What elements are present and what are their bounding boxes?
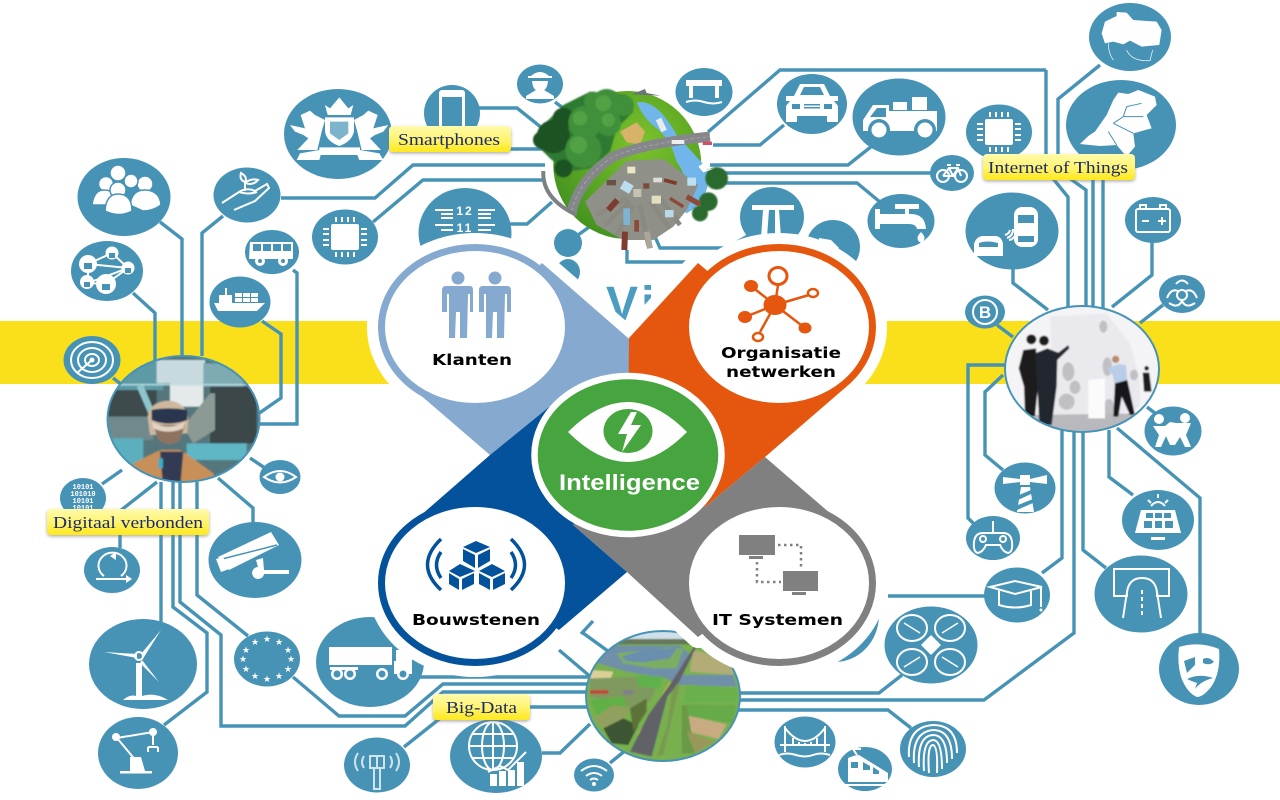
callout: Big-Data: Big-Data bbox=[446, 698, 518, 717]
icon: biohazard bbox=[1159, 275, 1205, 313]
icon: graduation cap bbox=[984, 568, 1050, 622]
icon: bridge top bbox=[676, 68, 732, 116]
icon: eye bbox=[260, 460, 300, 494]
panel: Intelligence bbox=[534, 376, 722, 534]
icon: EU stars: ★ bbox=[263, 675, 271, 685]
trees on right bbox=[692, 167, 728, 221]
road bbox=[572, 137, 710, 211]
callout: Big-Data bbox=[433, 694, 530, 720]
icon: wifi bbox=[574, 758, 614, 792]
icon: EU stars: ★ bbox=[239, 655, 247, 665]
icon: clipped circle near drone bbox=[791, 568, 879, 662]
icon: robot arm bbox=[98, 717, 178, 789]
callout: Internet of Things bbox=[983, 154, 1135, 180]
road side arc bbox=[543, 171, 577, 215]
icon: Dutch coat of arms bbox=[284, 89, 392, 179]
white panel behind logo bbox=[450, 321, 810, 384]
icon: car front bbox=[777, 74, 847, 134]
icon: water tap bbox=[868, 194, 934, 248]
icon: bitcoin: B bbox=[979, 303, 991, 322]
icon: EU stars: ★ bbox=[275, 638, 283, 648]
label: IT Systemen: IT Systemen bbox=[712, 611, 843, 629]
callout: Internet of Things: Internet of Things bbox=[988, 158, 1128, 177]
icon: location dot bbox=[554, 229, 582, 285]
white halo around central diagram bbox=[367, 233, 887, 677]
logo: Vi: Vi bbox=[606, 278, 658, 331]
label: Klanten: Klanten bbox=[432, 351, 512, 369]
icon: eye with lightning bolt bbox=[568, 402, 687, 462]
connector lines bbox=[102, 65, 1200, 763]
icon: EU stars: ★ bbox=[242, 665, 250, 675]
left icon group bbox=[60, 158, 614, 793]
icon: drone bbox=[884, 606, 978, 684]
icon: VR head bbox=[1089, 3, 1171, 71]
icon: person with helmet bbox=[517, 64, 563, 104]
icon: building blocks bbox=[428, 539, 524, 590]
icon: EU stars: ★ bbox=[287, 655, 295, 665]
callout: Smartphones: Smartphones bbox=[398, 130, 500, 149]
river bbox=[637, 102, 710, 213]
panel: Bouwstenen bbox=[382, 407, 628, 662]
photo: VR headset wearer bbox=[106, 355, 260, 483]
icon: solar panel bbox=[1122, 490, 1194, 550]
central diagram bbox=[382, 248, 872, 662]
icon: runway ruler: 12 bbox=[456, 204, 474, 218]
sand patch bbox=[620, 122, 645, 144]
forest bbox=[533, 89, 634, 177]
icon: lorry bbox=[316, 617, 424, 707]
panel: Klanten bbox=[382, 248, 690, 455]
icon: loop arrow bbox=[84, 547, 140, 593]
icon: fingerprint bbox=[900, 721, 966, 777]
icon: bitcoin bbox=[965, 296, 1005, 328]
icon: EU stars: ★ bbox=[284, 646, 292, 656]
icon: battery bbox=[1125, 197, 1181, 243]
icon: bus bbox=[245, 230, 299, 274]
icon: globe with chart bbox=[450, 719, 542, 793]
label: Bouwstenen: Bouwstenen bbox=[412, 611, 540, 629]
panel: Organisatie netwerken bbox=[628, 248, 872, 507]
icon: suspension bridge bbox=[774, 716, 836, 768]
icon: EU stars: ★ bbox=[242, 646, 250, 656]
icon: EU stars: ★ bbox=[284, 665, 292, 675]
icon: delivery van bbox=[852, 78, 946, 156]
icon: binary data: 10101 bbox=[72, 484, 94, 492]
callout: Digitaal verbonden: Digitaal verbonden bbox=[53, 513, 204, 532]
icon: binary data: 101010 bbox=[70, 491, 96, 499]
icon: cargo ship bbox=[210, 276, 270, 328]
icon: game controller bbox=[966, 516, 1020, 560]
label: Organisatie netwerken: netwerken bbox=[726, 363, 836, 381]
icon: EU stars bbox=[234, 632, 300, 686]
icon: bicycle bbox=[930, 155, 974, 191]
photo: business people with puzzle bbox=[1004, 305, 1160, 433]
icon: world fragment bbox=[806, 220, 860, 274]
icon: locks network bbox=[71, 241, 143, 301]
callout: Smartphones bbox=[389, 126, 511, 152]
icon: lighthouse bbox=[994, 462, 1056, 514]
city bbox=[585, 159, 700, 250]
background yellow band bbox=[0, 321, 1280, 384]
label: Organisatie netwerken bbox=[721, 344, 841, 381]
icon: security camera bbox=[208, 522, 302, 598]
icon: runway ruler bbox=[418, 188, 512, 278]
icon: EU stars: ★ bbox=[263, 635, 271, 645]
label: Organisatie netwerken: Organisatie bbox=[721, 344, 841, 362]
icon: microchip left bbox=[312, 210, 378, 264]
icon: parking sensor cars bbox=[966, 192, 1058, 270]
icon: smartphone bbox=[424, 85, 480, 141]
icon: runway ruler: 11 bbox=[457, 221, 473, 235]
label: Intelligence: Intelligence bbox=[559, 470, 700, 495]
icon: EU stars: ★ bbox=[251, 672, 259, 682]
icon: playing children bbox=[1144, 406, 1202, 456]
icon: Guy Fawkes mask bbox=[1159, 633, 1239, 705]
icon: binary data: 10101 bbox=[72, 505, 94, 513]
icon: microchip right bbox=[966, 104, 1032, 160]
top icon group bbox=[284, 3, 1239, 791]
icon: map of the Netherlands bbox=[1066, 80, 1176, 170]
callout: Digitaal verbonden bbox=[47, 509, 209, 535]
icon: connected monitors bbox=[739, 535, 818, 595]
panel: IT Systemen bbox=[573, 453, 872, 662]
icon: network bbox=[738, 268, 818, 341]
icon: tunnel bbox=[1094, 556, 1188, 632]
icon: wind turbine bbox=[89, 619, 197, 709]
icon: train bbox=[838, 747, 892, 791]
icon: two people bbox=[442, 272, 511, 338]
vehicles and boats bbox=[632, 89, 715, 172]
photo: aerial landscape with motorway bbox=[585, 630, 741, 762]
icon: EU stars: ★ bbox=[251, 638, 259, 648]
icon: EU stars: ★ bbox=[275, 672, 283, 682]
icon: binary data bbox=[60, 478, 106, 518]
icon: binary data: 10101 bbox=[72, 498, 94, 506]
icon: people group bbox=[78, 158, 170, 236]
icon: antenna tower bbox=[344, 738, 410, 792]
icon: radar bbox=[64, 336, 120, 384]
icon: highway bbox=[740, 187, 804, 247]
icon: hand with plant bbox=[214, 168, 280, 222]
photo: green globe with city and road bbox=[533, 89, 728, 250]
